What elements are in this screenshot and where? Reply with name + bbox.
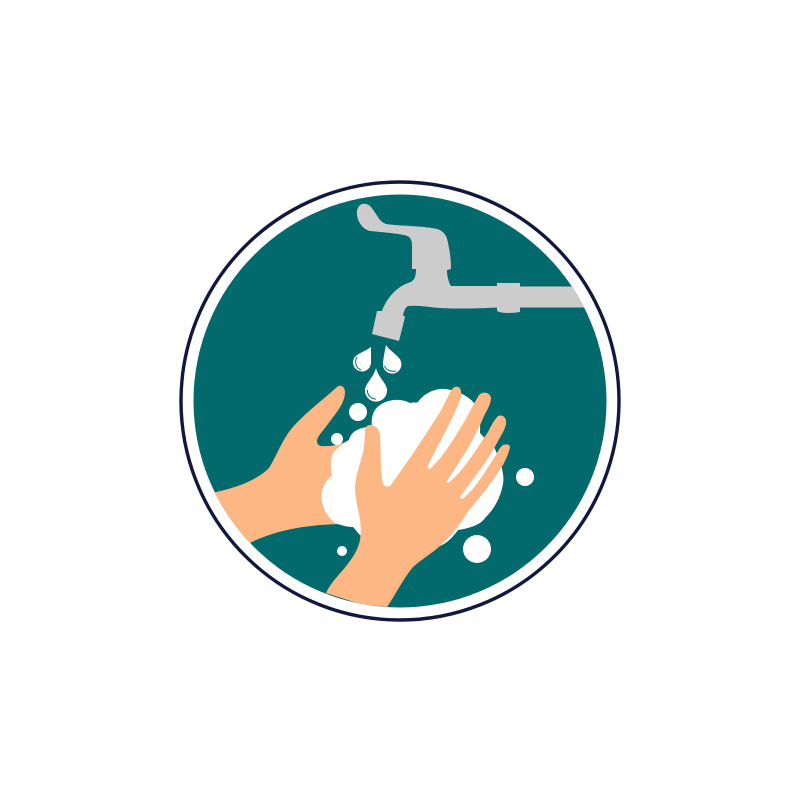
icon: left hand bbox=[214, 386, 349, 543]
icon: water faucet bbox=[357, 204, 590, 341]
icon: water drops bbox=[353, 345, 401, 402]
icon: hand washing badge bbox=[179, 180, 621, 622]
icon: soap foam bbox=[322, 389, 503, 546]
icon: soap bubbles bbox=[331, 403, 534, 563]
teal disc bbox=[194, 194, 606, 608]
icon: right hand bbox=[326, 387, 510, 607]
outer ring bbox=[181, 182, 619, 620]
